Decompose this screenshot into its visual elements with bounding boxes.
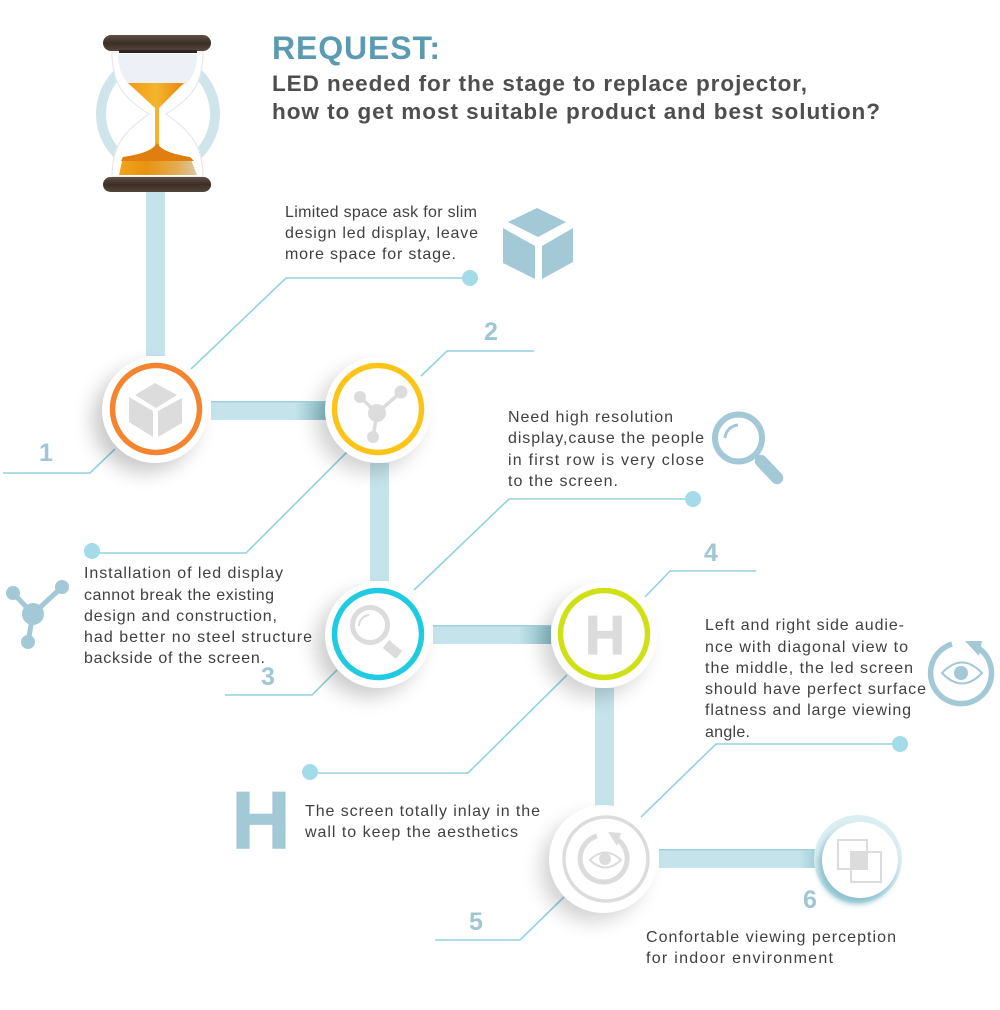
callout line: step 1 number <box>3 449 115 473</box>
step 4 node: H <box>542 582 657 697</box>
text: high resolution: display,cause the people <box>508 430 704 447</box>
connector: hourglass to step 1 <box>146 188 165 356</box>
callout line: step 2 number <box>421 351 534 376</box>
title: request: REQUEST: <box>272 30 440 66</box>
text: inlay <box>304 803 540 841</box>
text: left and right: angle. <box>705 724 750 741</box>
title: request: how to get most suitable product and best solution? <box>272 99 880 124</box>
text: left and right <box>705 617 926 741</box>
text: high resolution: Need high resolution <box>508 409 673 426</box>
text: inlay: The screen totally inlay in the <box>305 803 540 820</box>
callout line: step 2 text <box>84 452 347 559</box>
callout line: step 3 text <box>414 491 701 590</box>
number 3: 3 <box>261 663 275 691</box>
text: installation: backside of the screen. <box>84 650 265 667</box>
text: left and right: nce with diagonal view to <box>705 639 908 656</box>
text: high resolution <box>508 409 704 490</box>
number 1: 1 <box>39 439 53 467</box>
callout line: step 5 text <box>641 736 908 817</box>
icon: large magnifier <box>715 414 777 478</box>
number 6: 6 <box>803 886 817 914</box>
text: installation: had better no steel structure <box>84 629 312 646</box>
text: left and right: flatness and large viewing <box>705 702 911 719</box>
icon: hourglass <box>101 35 215 192</box>
number 5: 5 <box>469 908 483 936</box>
step 3 node: magnifier <box>316 582 431 697</box>
text: limited space <box>285 204 478 263</box>
icon: large molecule <box>6 580 69 649</box>
callout line: step 4 number <box>645 571 756 597</box>
text: inlay: wall to keep the aesthetics <box>304 824 518 841</box>
text: installation: design and construction, <box>84 608 277 625</box>
connector: step 1 to step 2 <box>211 401 327 420</box>
callout line: top to step 1 <box>191 270 478 369</box>
step 1 node: cube <box>93 357 208 472</box>
number 4: 4 <box>704 539 718 567</box>
text: left and right: the middle, the led screen <box>705 660 913 677</box>
callout line: step 4 text <box>302 675 567 780</box>
number 2: 2 <box>484 318 498 346</box>
text: limited space: more space for stage. <box>285 246 456 263</box>
step 2 node: molecule <box>316 357 431 472</box>
step 6 node: overlapping squares <box>814 815 902 904</box>
text: viewing perception: Confortable viewing perception <box>646 929 896 946</box>
title: request <box>272 30 880 124</box>
text: viewing perception <box>646 929 896 967</box>
text: installation: Installation of led display <box>84 565 283 582</box>
text: left and right: should have perfect surface <box>705 681 926 698</box>
callout line: step 5 number <box>435 897 564 940</box>
callout line: step 3 number <box>225 670 337 695</box>
text: high resolution: in first row is very close <box>508 452 704 469</box>
icon: large H: H <box>232 776 290 866</box>
icon: large eye <box>931 641 992 704</box>
connector: step 2 to step 3 <box>370 463 389 581</box>
connector: step 3 to step 4 <box>433 625 551 644</box>
text: limited space: design led display, leave <box>285 225 478 242</box>
title: request: LED needed for the stage to replace projector, <box>272 71 807 96</box>
text: limited space: Limited space ask for slim <box>285 204 477 221</box>
step 5 node: eye <box>541 805 657 921</box>
text: installation: cannot break the existing <box>84 587 274 604</box>
step 4 node: H: H <box>585 604 625 666</box>
connector: step 5 to step 6 <box>659 849 827 868</box>
icon: large cube <box>503 208 573 279</box>
connector: step 4 to step 5 <box>595 688 614 806</box>
text: installation <box>84 565 312 667</box>
text: high resolution: to the screen. <box>508 473 618 490</box>
text: left and right: Left and right side audie- <box>705 617 904 634</box>
text: viewing perception: for indoor environment <box>646 950 834 967</box>
